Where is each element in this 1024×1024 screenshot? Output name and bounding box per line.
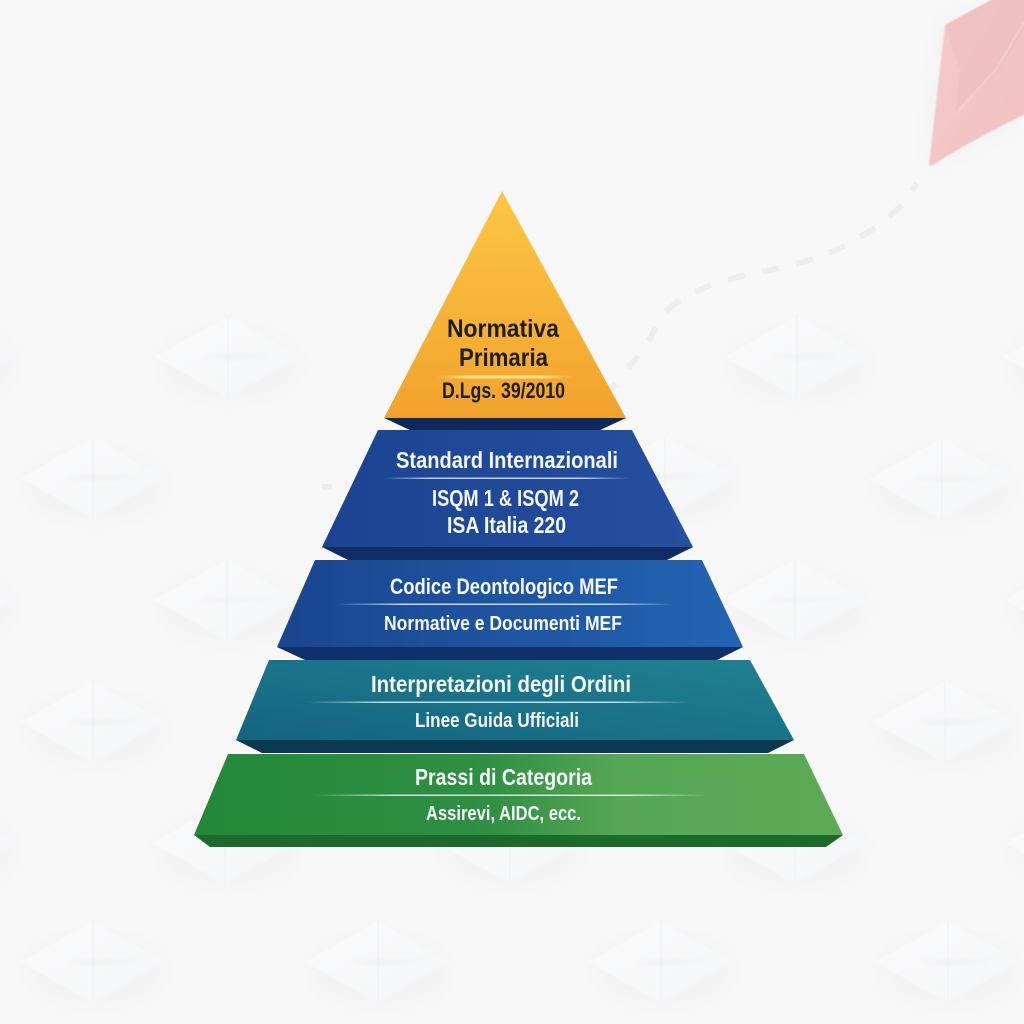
tier 2: Standard Internazionali: Standard Internazionali [396, 447, 618, 473]
pyramid [194, 191, 843, 847]
tier 1: Normativa Primaria [384, 191, 626, 431]
background paper boats pattern [0, 316, 1024, 1004]
tier 4: Interpretazioni degli Ordini: Linee Guida Ufficiali [415, 710, 579, 732]
tier 3: Codice Deontologico MEF: Normative e Documenti MEF [384, 613, 622, 635]
icon: red paper boat [929, 0, 1024, 165]
tier 5: Prassi di Categoria: Assirevi, AIDC, ecc. [426, 803, 581, 825]
tier 5: Prassi di Categoria [194, 754, 843, 847]
tier 2: Standard Internazionali: ISQM 1 & ISQM 2 [432, 485, 579, 511]
tier 4: Interpretazioni degli Ordini: Interpretazioni degli Ordini [371, 671, 631, 697]
tier 1: Normativa Primaria: D.Lgs. 39/2010 [442, 378, 565, 403]
dashed flight path [322, 183, 917, 487]
tier 3: Codice Deontologico MEF [277, 560, 743, 660]
tier 4: Interpretazioni degli Ordini [236, 660, 794, 753]
tier 1: Normativa Primaria: Primaria [459, 344, 549, 372]
tier 3: Codice Deontologico MEF: Codice Deontologico MEF [390, 574, 618, 599]
tier 2: Standard Internazionali [322, 430, 693, 560]
tier 2: Standard Internazionali: ISA Italia 220 [447, 512, 566, 538]
tier 5: Prassi di Categoria: Prassi di Categoria [415, 764, 592, 790]
tier 1: Normativa Primaria: Normativa [447, 315, 560, 343]
